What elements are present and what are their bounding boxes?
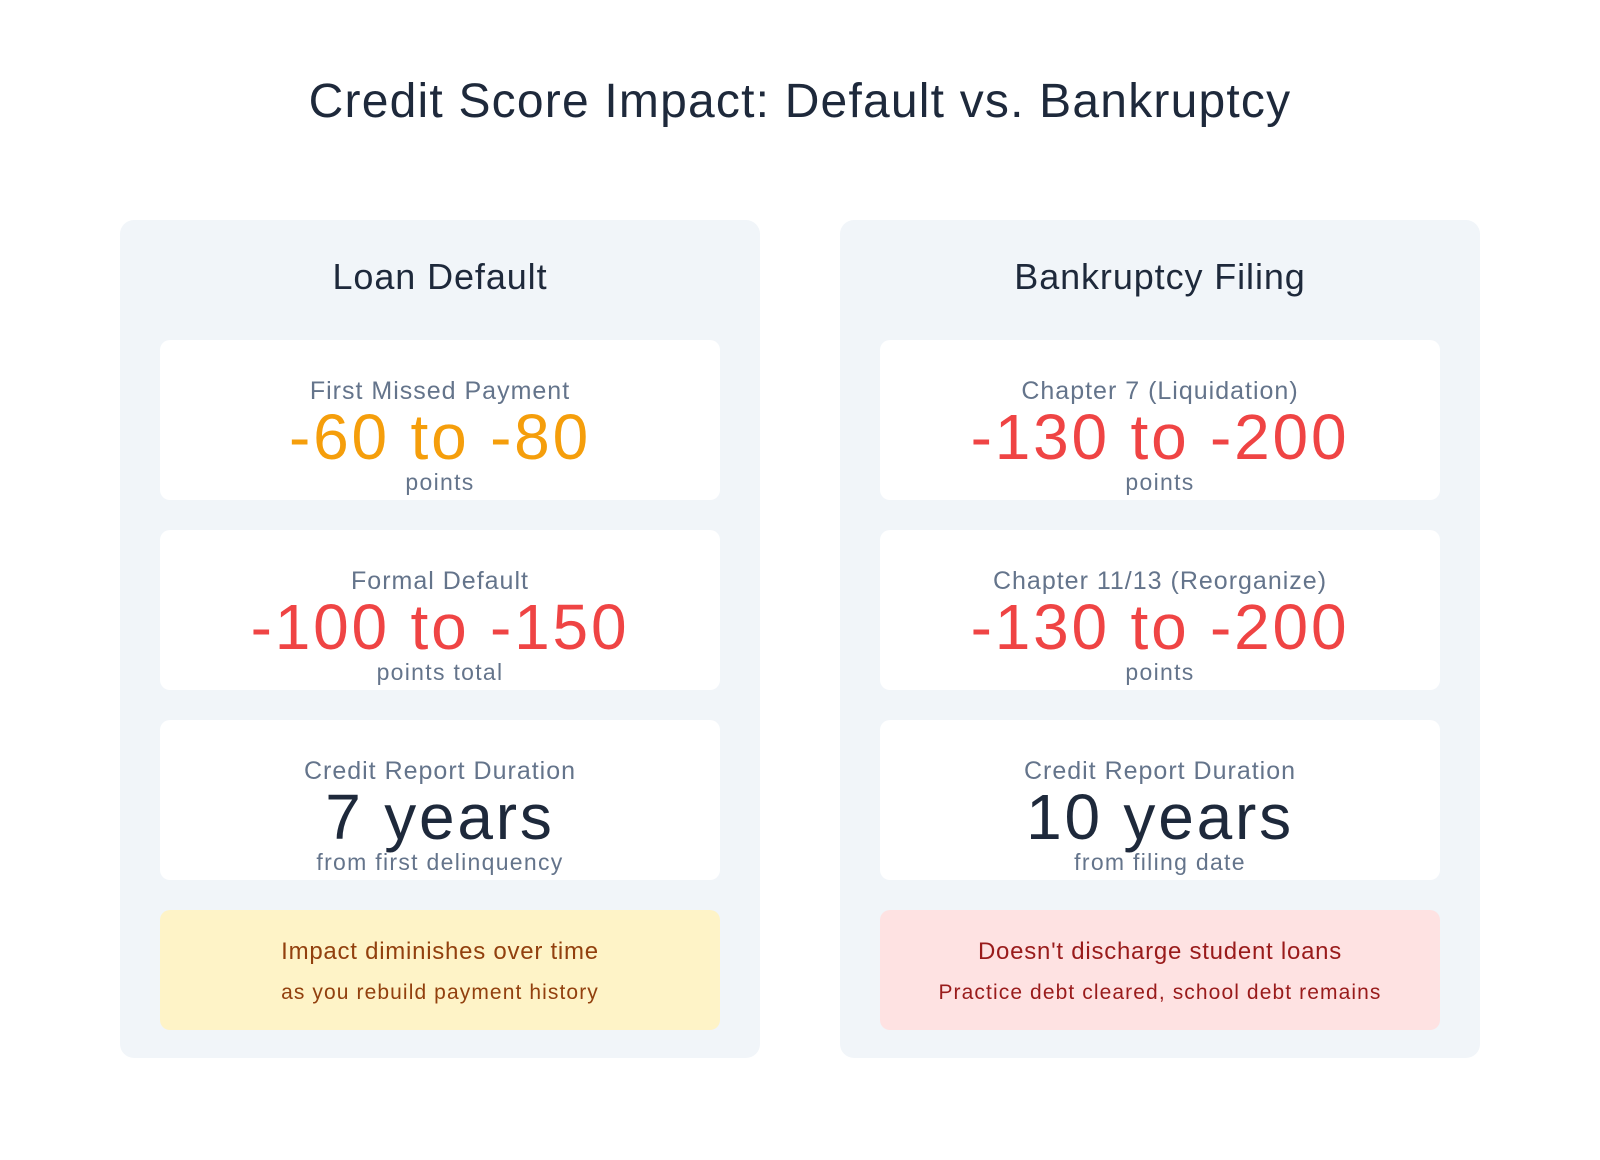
- panel: loan default: [120, 220, 760, 1058]
- card: first missed payment: First Missed Payment: [310, 377, 570, 405]
- card: chapter 11/13: Chapter 11/13 (Reorganize): [993, 567, 1327, 595]
- card: credit report duration: [880, 720, 1440, 880]
- callout: student loans: [880, 910, 1440, 1030]
- panel: bankruptcy filing: [840, 220, 1480, 1058]
- callout: impact diminishes: as you rebuild payment history: [281, 981, 599, 1004]
- title: Credit Score Impact: Default vs. Bankruptcy: [309, 75, 1291, 128]
- card: chapter 7: points: [1125, 469, 1195, 495]
- card: formal default: points total: [377, 659, 503, 685]
- card: chapter 11/13: points: [1125, 659, 1195, 685]
- panel heading: Loan Default: [333, 256, 547, 297]
- card: credit report duration: from first delinquency: [316, 849, 564, 875]
- card: first missed payment: points: [405, 469, 475, 495]
- card: credit report duration: Credit Report Duration: [304, 757, 576, 785]
- card: formal default: [160, 530, 720, 690]
- callout: student loans: Practice debt cleared, school debt remains: [938, 981, 1382, 1004]
- callout: impact diminishes: [160, 910, 720, 1030]
- card: credit report duration: [160, 720, 720, 880]
- card: chapter 11/13: -130 to -200: [971, 591, 1349, 663]
- card: chapter 7: -130 to -200: [971, 401, 1349, 473]
- card: first missed payment: [160, 340, 720, 500]
- card: formal default: -100 to -150: [251, 591, 629, 663]
- card: credit report duration: from filing date: [1074, 849, 1246, 875]
- card: chapter 7: [880, 340, 1440, 500]
- callout: student loans: Doesn't discharge student loans: [978, 938, 1342, 965]
- card: chapter 11/13: [880, 530, 1440, 690]
- card: chapter 7: Chapter 7 (Liquidation): [1021, 377, 1299, 405]
- callout: impact diminishes: Impact diminishes over time: [281, 938, 599, 965]
- card: formal default: Formal Default: [351, 567, 529, 595]
- card: credit report duration: Credit Report Duration: [1024, 757, 1296, 785]
- card: credit report duration: 10 years: [1026, 781, 1294, 853]
- card: first missed payment: -60 to -80: [289, 401, 591, 473]
- card: credit report duration: 7 years: [325, 781, 555, 853]
- panel heading: Bankruptcy Filing: [1014, 256, 1306, 297]
